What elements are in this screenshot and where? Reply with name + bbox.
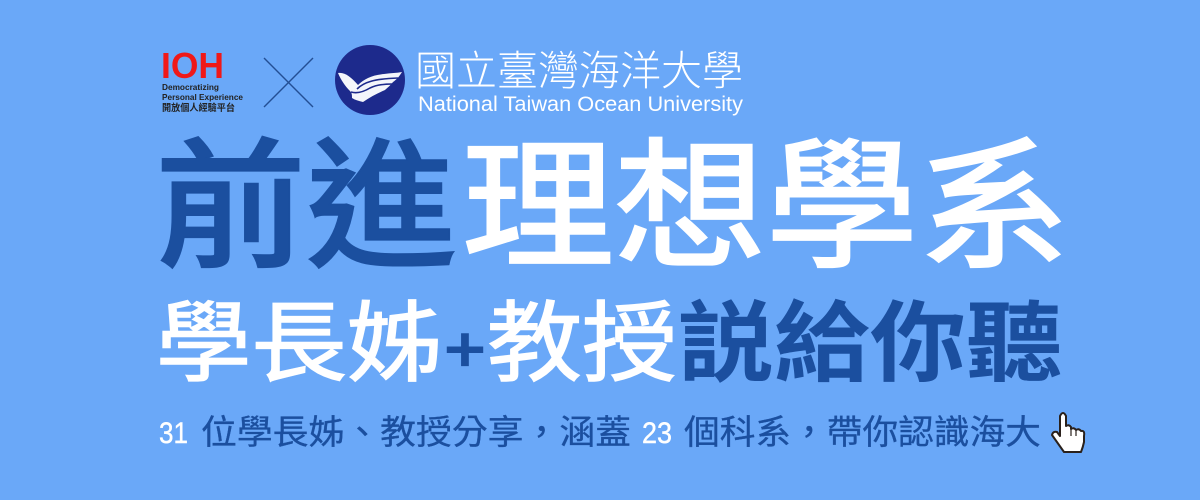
bottom text line <box>159 405 1041 454</box>
subhead: professors: 教授 <box>487 273 677 400</box>
number 23: 23 <box>642 417 672 450</box>
logo: IOH: 開放個人經驗平台 <box>162 100 235 114</box>
logo: NTOU English name: National Taiwan Ocean University <box>418 93 744 116</box>
logo: IOH: IOH <box>161 45 224 86</box>
logo: IOH: Democratizing <box>162 82 219 92</box>
subhead: plus: + <box>444 301 486 391</box>
logo: IOH <box>161 45 243 114</box>
subhead: seniors: 學長姊 <box>156 273 442 400</box>
description right: 個科系，帶你認識海大 <box>684 405 1041 454</box>
logo: NTOU Chinese name: 國立臺灣海洋大學 <box>415 37 743 97</box>
headline: dark part: 前進 <box>155 92 457 297</box>
headline: white part: 理想學系 <box>462 92 1070 297</box>
cross symbol <box>264 58 313 107</box>
description left: 位學長姊、教授分享，涵蓋 <box>201 405 631 454</box>
subhead: tell you: 説給你聽 <box>678 273 1062 400</box>
logo: IOH: Personal Experience <box>162 92 243 102</box>
headline line 1 <box>155 92 1070 297</box>
number 31: 31 <box>159 417 188 450</box>
logo: NTOU emblem <box>335 45 405 115</box>
headline line 2 <box>156 273 1062 400</box>
icon: pointing hand cursor <box>1052 413 1084 452</box>
